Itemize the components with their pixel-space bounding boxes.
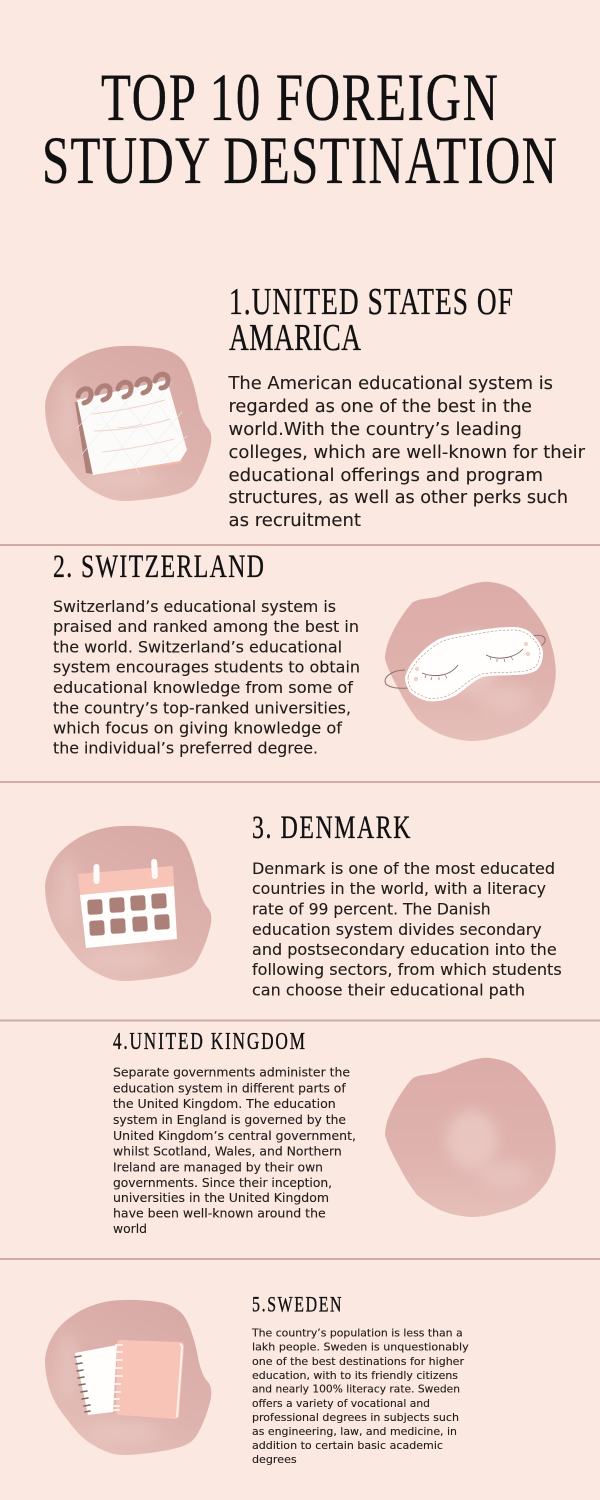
body text: can choose their educational path — [252, 981, 525, 1000]
heading: 3. DENMARK — [252, 809, 411, 846]
body text: countries in the world, with a literacy — [252, 879, 546, 898]
body text: system in England is governed by the — [113, 1113, 346, 1127]
panel: Denmark — [45, 809, 562, 1000]
body text: governments. Since their inception, — [113, 1176, 332, 1190]
body text: The country’s population is less than a — [251, 1327, 463, 1340]
body text: universities in the United Kingdom — [113, 1191, 329, 1205]
body text: education system in different parts of — [113, 1082, 346, 1096]
title: TOP 10 FOREIGN — [101, 59, 498, 135]
body text: whilst Scotland, Wales, and Northern — [113, 1145, 342, 1159]
icon: notepad on blob — [45, 346, 211, 501]
heading: 1.UNITED STATES OF — [229, 281, 513, 323]
body text: degrees — [252, 1453, 297, 1466]
body text: addition to certain basic academic — [252, 1439, 443, 1452]
body text — [53, 597, 360, 758]
heading: 2. SWITZERLAND — [53, 548, 264, 585]
icon: sleep mask on blob — [385, 582, 556, 741]
body text: rate of 99 percent. The Danish — [252, 900, 491, 919]
body text: The American educational system is — [227, 374, 553, 394]
icon: calendar on blob — [45, 826, 211, 981]
panel: United Kingdom — [113, 1027, 556, 1236]
body text: following sectors, from which students — [252, 960, 562, 979]
body text: the individual’s preferred degree. — [53, 739, 318, 758]
title: STUDY DESTINATION — [42, 122, 557, 198]
body text: education system divides secondary — [252, 920, 542, 939]
panel: United States of America — [45, 281, 586, 531]
body text: the United Kingdom. The education — [113, 1097, 336, 1111]
body text — [113, 1066, 356, 1236]
body text — [227, 374, 586, 531]
body text: colleges, which are well-known for their — [228, 443, 586, 463]
heading — [229, 281, 513, 359]
body text: the world. Switzerland’s educational — [53, 638, 342, 657]
heading: 5.SWEDEN — [252, 1293, 342, 1317]
body text: professional degrees in subjects such — [252, 1411, 459, 1424]
body text: Separate governments administer the — [113, 1066, 350, 1080]
icon: notebooks on blob — [45, 1300, 211, 1455]
heading: AMARICA — [229, 317, 361, 359]
panel: Sweden — [45, 1293, 469, 1466]
panel: Switzerland — [53, 548, 556, 758]
body text: Switzerland’s educational system is — [53, 597, 336, 616]
heading: 4.UNITED KINGDOM — [113, 1027, 305, 1055]
body text: which focus on giving knowledge of — [53, 718, 342, 737]
body text: structures, as well as other perks such — [228, 488, 568, 508]
body text: Ireland are managed by their own — [113, 1161, 323, 1175]
body text: world — [113, 1222, 147, 1236]
body text: have been well-known around the — [113, 1207, 326, 1221]
body text: Denmark is one of the most educated — [252, 859, 555, 878]
body text: and nearly 100% literacy rate. Sweden — [252, 1383, 460, 1396]
body text: as engineering, law, and medicine, in — [252, 1425, 457, 1438]
icon: empty blob — [385, 1058, 556, 1217]
body text: educational offerings and program — [228, 466, 543, 486]
body text: United Kingdom’s central government, — [113, 1129, 356, 1143]
body text: offers a variety of vocational and — [252, 1397, 430, 1410]
body text: education, with to its friendly citizens — [252, 1369, 458, 1382]
title — [42, 59, 557, 198]
body text: system encourages students to obtain — [53, 658, 360, 677]
body text — [251, 1327, 469, 1466]
body text: educational knowledge from some of — [53, 678, 353, 697]
body text: as recruitment — [228, 511, 361, 531]
body text: world.With the country’s leading — [228, 420, 522, 440]
body text: and postsecondary education into the — [252, 940, 557, 959]
body text: praised and ranked among the best in — [53, 617, 359, 636]
body text: lakh people. Sweden is unquestionably — [252, 1341, 469, 1354]
body text: the country’s top-ranked universities, — [53, 698, 351, 717]
body text: regarded as one of the best in the — [228, 397, 532, 417]
body text — [252, 859, 562, 1000]
body text: one of the best destinations for higher — [252, 1355, 464, 1368]
